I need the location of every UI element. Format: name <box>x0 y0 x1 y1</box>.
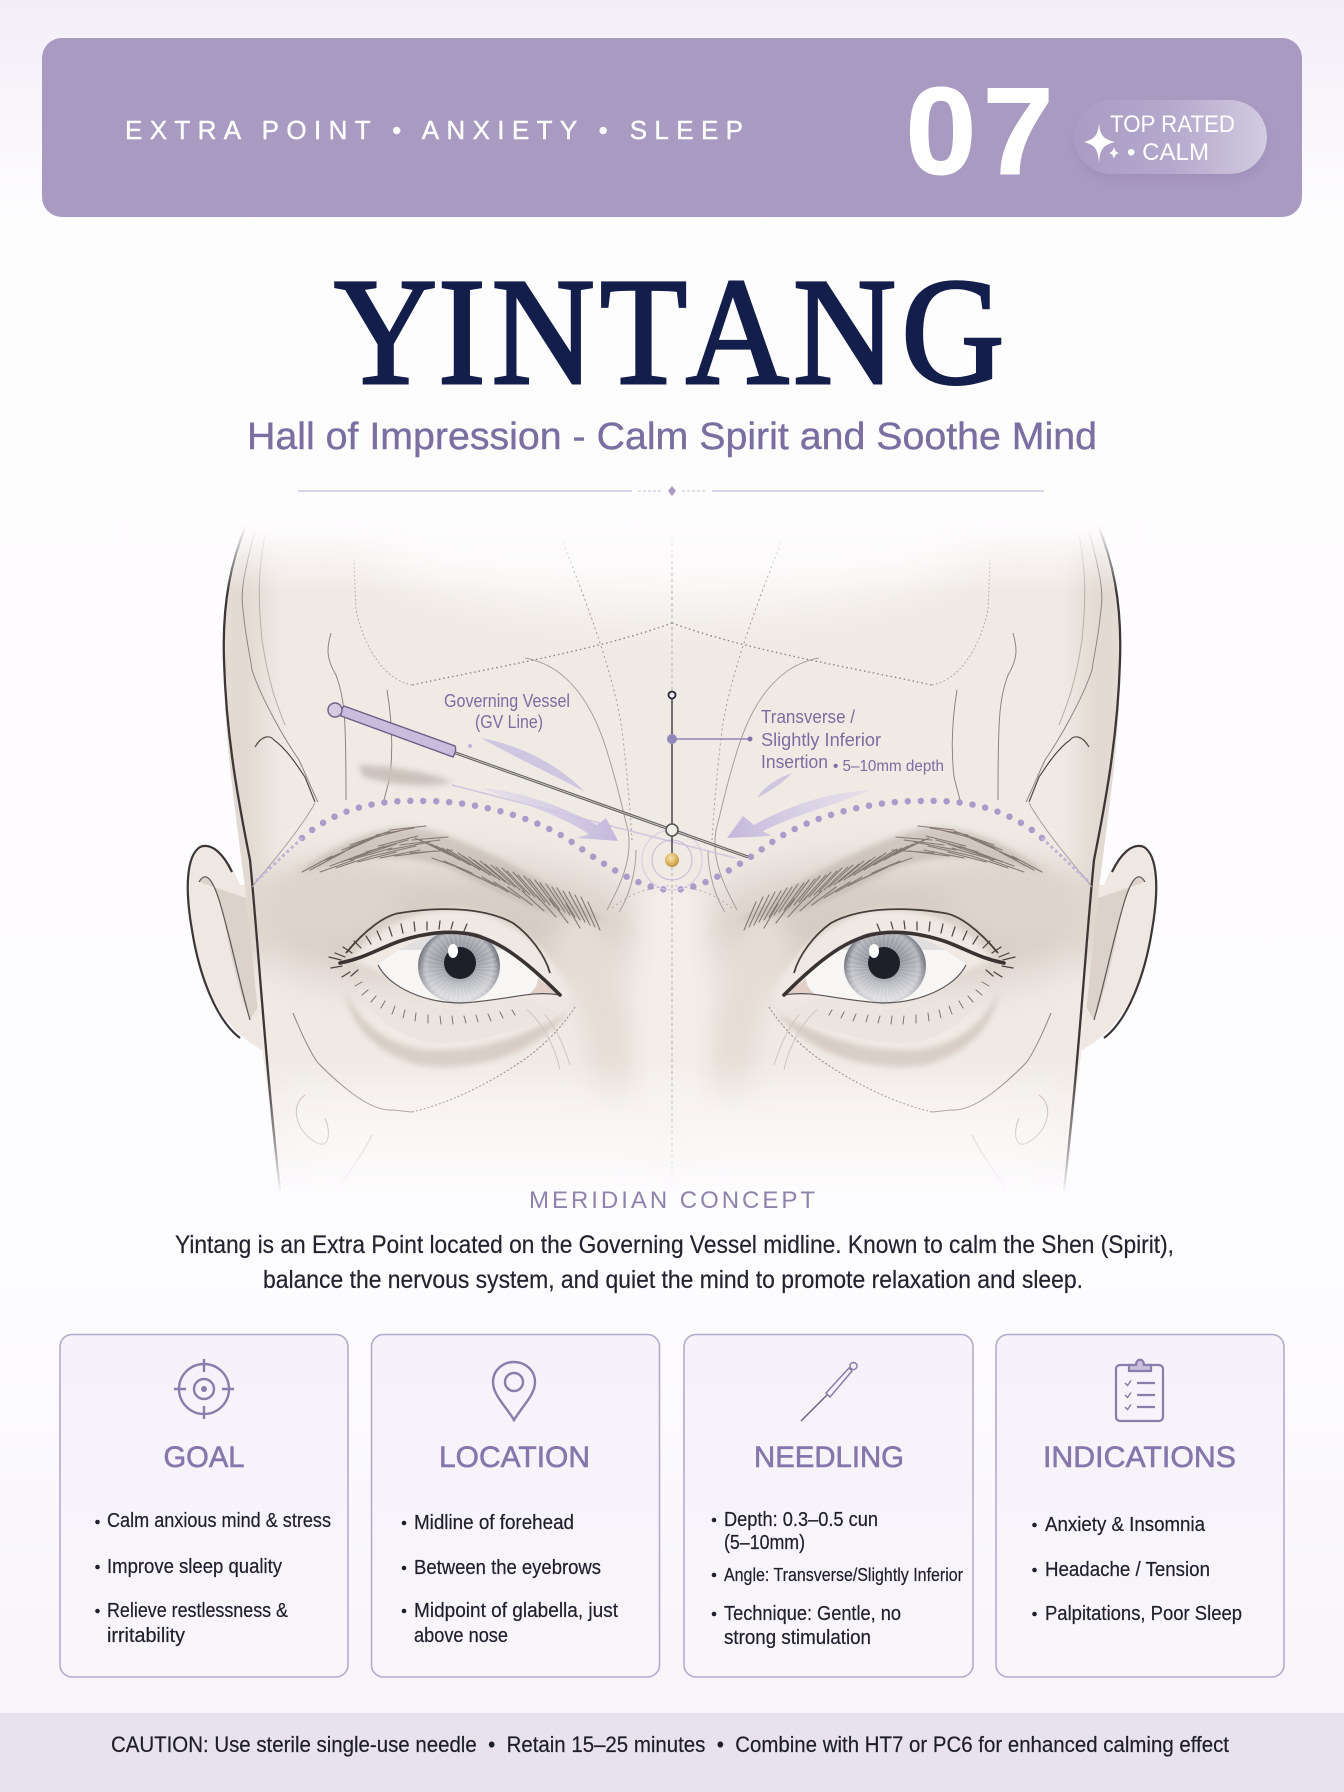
point markers on midline <box>642 692 752 890</box>
heading: indications: INDICATIONS <box>1043 1441 1236 1474</box>
small arrow right <box>757 773 792 798</box>
eyebrow <box>299 826 604 930</box>
panel: needling <box>684 1334 973 1677</box>
list: goal: Relieve restlessness & <box>107 1600 289 1622</box>
list: needling: (5–10mm) <box>724 1532 805 1554</box>
upper lid light <box>350 909 572 1000</box>
title: YINTANG <box>334 248 1004 417</box>
temple and cheek contour lines <box>242 530 672 1195</box>
concentric rings <box>652 840 692 880</box>
badge: top rated calm <box>1074 100 1267 180</box>
header banner <box>42 38 1302 217</box>
heading: location: LOCATION <box>439 1441 590 1474</box>
list: indications <box>1032 1514 1242 1625</box>
panel: indications <box>996 1334 1284 1677</box>
midline dashed <box>672 532 673 1182</box>
Yintang gold point <box>665 853 679 867</box>
description <box>175 1231 1174 1294</box>
ornamental divider <box>298 486 1044 496</box>
skin <box>200 470 972 1215</box>
badge: top rated calm: TOP RATED <box>1110 111 1235 138</box>
panel: goal <box>60 1334 348 1677</box>
list: location <box>402 1512 618 1647</box>
panel: location <box>372 1334 660 1677</box>
acupuncture needle <box>328 703 748 857</box>
caution bar <box>0 1713 1344 1792</box>
icon: needle <box>801 1362 857 1421</box>
callout dot to insertion text <box>667 734 677 744</box>
list: location: Midpoint of glabella, just <box>414 1600 618 1622</box>
meridian dotted arc <box>302 801 672 890</box>
annotation: insertion angle: Slightly Inferior <box>761 729 881 750</box>
annotation: insertion angle: Transverse / <box>761 706 856 727</box>
under-eye bag <box>345 990 568 1068</box>
list: location: Midline of forehead <box>414 1512 574 1534</box>
cheek fade <box>588 1087 755 1123</box>
list: indications: Palpitations, Poor Sleep <box>1045 1603 1242 1625</box>
subtitle: Hall of Impression - Calm Spirit and Soothe Mind <box>247 416 1097 458</box>
annotation: insertion angle: • 5–10mm depth <box>833 758 944 775</box>
annotation: governing vessel: Governing Vessel <box>444 690 570 711</box>
list: location: above nose <box>414 1625 508 1647</box>
face illustration <box>186 528 1158 1190</box>
half face (left) <box>188 470 972 1215</box>
description: balance the nervous system, and quiet the mind to promote relaxation and sleep. <box>263 1266 1083 1294</box>
list: needling: Technique: Gentle, no <box>724 1603 901 1625</box>
description: Yintang is an Extra Point located on the Governing Vessel midline. Known to calm the Shen (Spirit), <box>175 1231 1174 1259</box>
head outline <box>224 525 280 1190</box>
annotation: insertion angle: Insertion <box>761 751 828 772</box>
icon: target <box>174 1359 234 1419</box>
list: needling: Depth: 0.3–0.5 cun <box>724 1509 878 1531</box>
small arrow left <box>481 738 585 792</box>
list: goal: Improve sleep quality <box>107 1556 282 1578</box>
icon: location pin <box>493 1362 535 1420</box>
heading: goal: GOAL <box>164 1441 244 1474</box>
list: needling: strong stimulation <box>724 1627 871 1649</box>
ear <box>188 845 275 1050</box>
flow arrows <box>468 738 871 841</box>
arrow right <box>727 790 871 838</box>
meridian concept heading: MERIDIAN CONCEPT <box>529 1187 815 1214</box>
list: goal: Calm anxious mind & stress <box>107 1510 331 1532</box>
annotation: governing vessel <box>444 690 570 732</box>
list: needling <box>712 1509 963 1649</box>
caution bar: CAUTION: Use sterile single-use needle • Retain 15–25 minutes • Combine with HT7 or PC6 for enhanced calming effect <box>111 1732 1229 1757</box>
arrow left <box>481 788 618 841</box>
forehead dotted line <box>412 623 672 685</box>
badge: top rated calm: • CALM <box>1127 139 1209 166</box>
point number: 07 <box>905 62 1054 201</box>
list: indications: Anxiety & Insomnia <box>1045 1514 1206 1536</box>
eye socket shade <box>250 865 640 985</box>
heading: needling: NEEDLING <box>754 1441 904 1474</box>
list: location: Between the eyebrows <box>414 1557 601 1579</box>
list: goal <box>95 1510 331 1647</box>
eye highlights <box>448 944 879 958</box>
nose side shade <box>550 900 636 1120</box>
annotation: insertion angle <box>761 706 944 775</box>
list: goal: irritability <box>107 1625 185 1647</box>
icon: clipboard <box>1116 1360 1163 1421</box>
needle shadow <box>359 765 735 858</box>
list: indications: Headache / Tension <box>1045 1559 1210 1581</box>
banner tagline: EXTRA POINT • ANXIETY • SLEEP <box>125 115 743 145</box>
eye <box>329 909 570 1070</box>
annotation: governing vessel: (GV Line) <box>475 711 543 732</box>
list: needling: Angle: Transverse/Slightly Inferior <box>724 1565 963 1585</box>
mirrored half face (right) <box>372 470 1156 1215</box>
